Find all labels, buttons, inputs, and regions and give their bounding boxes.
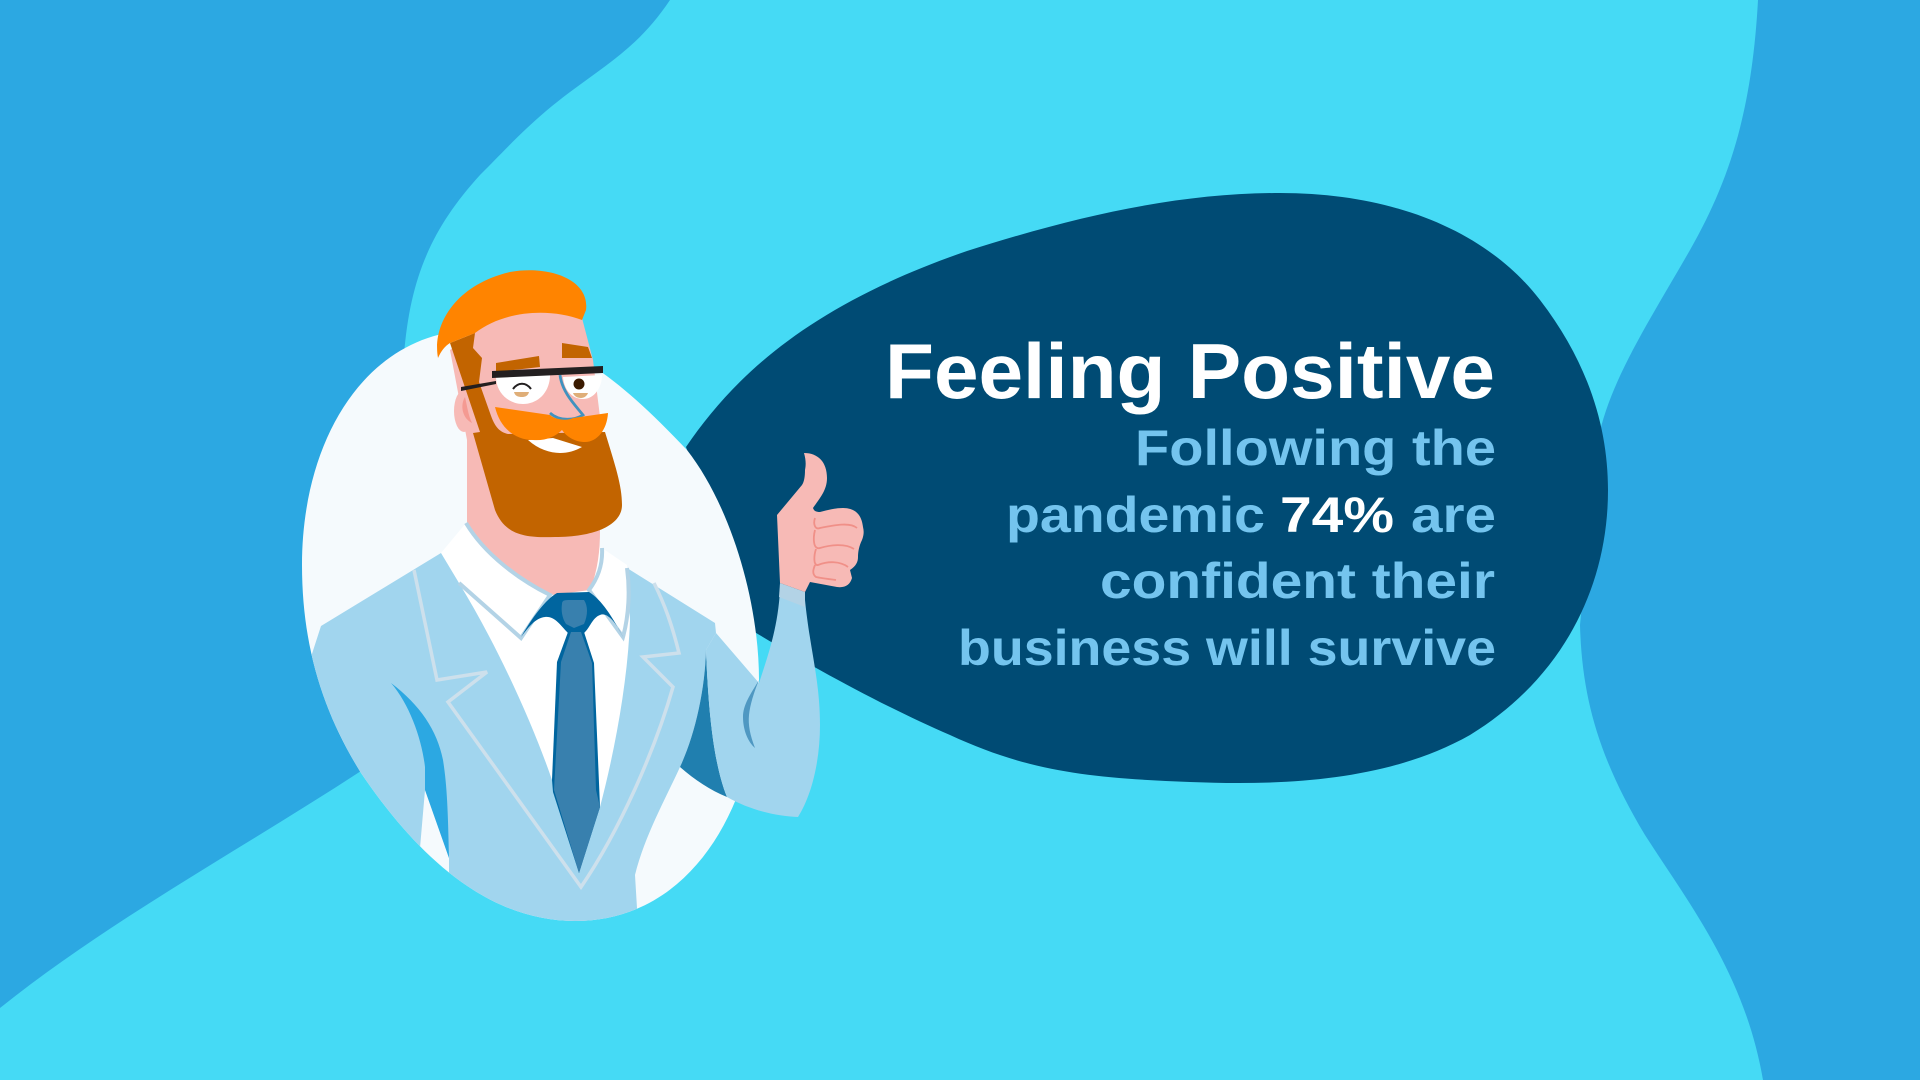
right pupil (574, 378, 584, 390)
elbow crease (743, 680, 759, 748)
ear (454, 390, 474, 432)
mustache (495, 407, 608, 442)
suit jacket (312, 553, 716, 921)
collar (459, 523, 629, 638)
line 3: confident their (1100, 553, 1495, 609)
shirt cuff (779, 583, 805, 607)
jacket sleeve shadow (391, 683, 449, 858)
body text (958, 420, 1496, 676)
line 4: business will survive (958, 620, 1496, 676)
nose line (550, 375, 583, 419)
neck and face (450, 308, 600, 595)
line 2: 74% (1280, 487, 1394, 543)
winking eye (513, 384, 531, 389)
forearm sleeve (706, 590, 820, 817)
inner ear (462, 397, 472, 423)
line 2: pandemic (1006, 487, 1265, 543)
hair (437, 270, 586, 358)
line 2: are (1411, 487, 1496, 543)
right background blob (1580, 0, 1920, 1080)
smile (528, 438, 582, 453)
thumbs up hand (777, 453, 864, 592)
tie knot (521, 592, 623, 637)
left background blob (0, 0, 670, 1008)
left eye (496, 375, 550, 404)
finger lines (813, 518, 857, 580)
tie knot highlight (562, 600, 587, 628)
eyebrows (496, 343, 592, 372)
tie highlight (554, 632, 600, 873)
dark shadow under arm (680, 650, 727, 797)
illustration: businessman giving a thumbs up (300, 270, 864, 960)
shirt (441, 523, 630, 807)
lapel stitching (414, 570, 679, 887)
beard and sideburn (450, 333, 622, 537)
right eye tint (573, 393, 588, 398)
left eye tint (514, 392, 529, 397)
white oval backdrop (302, 330, 759, 921)
line 2 (1006, 487, 1496, 543)
right eye (563, 375, 602, 399)
speech bubble (686, 193, 1608, 783)
tie (552, 632, 600, 873)
line 1: Following the (1135, 420, 1496, 476)
glasses (461, 366, 603, 391)
title: Feeling Positive (885, 327, 1495, 415)
